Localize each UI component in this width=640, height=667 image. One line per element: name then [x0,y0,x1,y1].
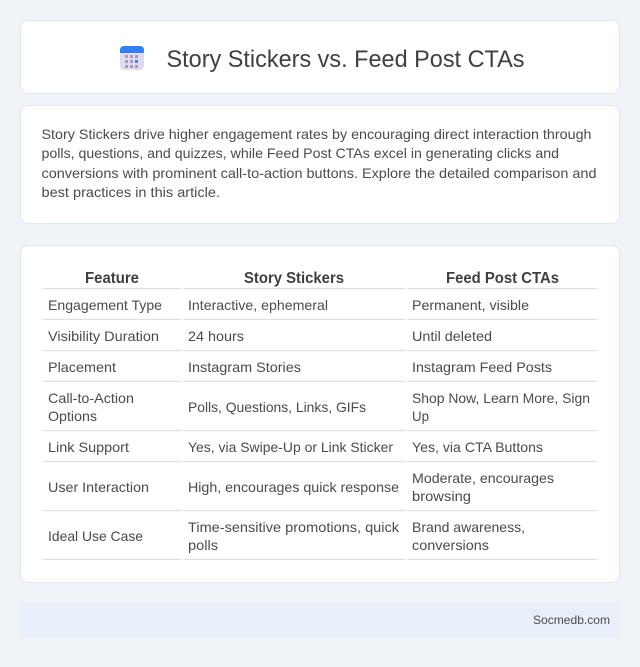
table header [85,270,559,287]
table row: Ideal Use Case: polls [188,537,218,553]
table row: Link Support: Link Support [48,439,129,455]
table row: Link Support [48,439,543,455]
table header: Story Stickers [244,270,344,287]
table row: Placement: Instagram Feed Posts [412,359,552,375]
table row: Placement: Instagram Stories [188,359,301,375]
intro paragraph: polls, questions, and quizzes, while Feed Post CTAs excel in generating clicks and [42,145,559,161]
table row: Call-to-Action Options [48,390,590,424]
table row: Engagement Type [48,297,529,313]
intro paragraph [42,126,596,200]
table header: Feed Post CTAs [446,270,559,287]
title: Story Stickers vs. Feed Post CTAs [166,46,524,73]
table row: Engagement Type: Interactive, ephemeral [188,297,328,313]
table row: Ideal Use Case: Time-sensitive promotions, quick [188,519,400,535]
table row: Engagement Type: Permanent, visible [412,297,529,313]
table row: Visibility Duration: Until deleted [412,328,492,344]
table row: Call-to-Action Options: Options [48,408,97,424]
table row: Visibility Duration [48,328,492,344]
footer: Socmedb.com [533,613,610,627]
icon: calendar [120,46,144,70]
table row: Placement: Placement [48,359,116,375]
table row: Visibility Duration: 24 hours [188,328,244,344]
table row: Ideal Use Case: Brand awareness, [412,519,525,535]
table row: Link Support: Yes, via Swipe-Up or Link Sticker [188,439,393,455]
table row: Placement [48,359,552,375]
table row: User Interaction: browsing [412,488,471,504]
footer [20,603,620,637]
panel: comparison table [20,246,620,582]
table row: Engagement Type: Engagement Type [48,297,162,313]
intro paragraph: Story Stickers drive higher engagement rates by encouraging direct interaction through [42,126,592,142]
table row: Link Support: Yes, via CTA Buttons [412,439,543,455]
table row: Ideal Use Case [48,519,525,553]
panel: intro text [20,106,620,224]
table row: Call-to-Action Options: Polls, Questions, Links, GIFs [188,399,366,415]
table row: Call-to-Action Options: Up [412,408,429,424]
table row: User Interaction: High, encourages quick response [188,479,399,495]
table row: User Interaction [48,470,554,504]
table row: Ideal Use Case: conversions [412,537,489,553]
intro paragraph: best practices in this article. [42,184,220,200]
table row: User Interaction: Moderate, encourages [412,470,554,486]
table row: Call-to-Action Options: Shop Now, Learn More, Sign [412,390,590,406]
table row: Call-to-Action Options: Call-to-Action [48,390,134,406]
intro paragraph: conversions with prominent call-to-action buttons. Explore the detailed comparison and [42,165,596,181]
panel: title card [20,20,620,94]
table row: User Interaction: User Interaction [48,479,149,495]
table header: Feature [85,270,139,287]
table row: Ideal Use Case: Ideal Use Case [48,528,143,544]
table row: Visibility Duration: Visibility Duration [48,328,159,344]
